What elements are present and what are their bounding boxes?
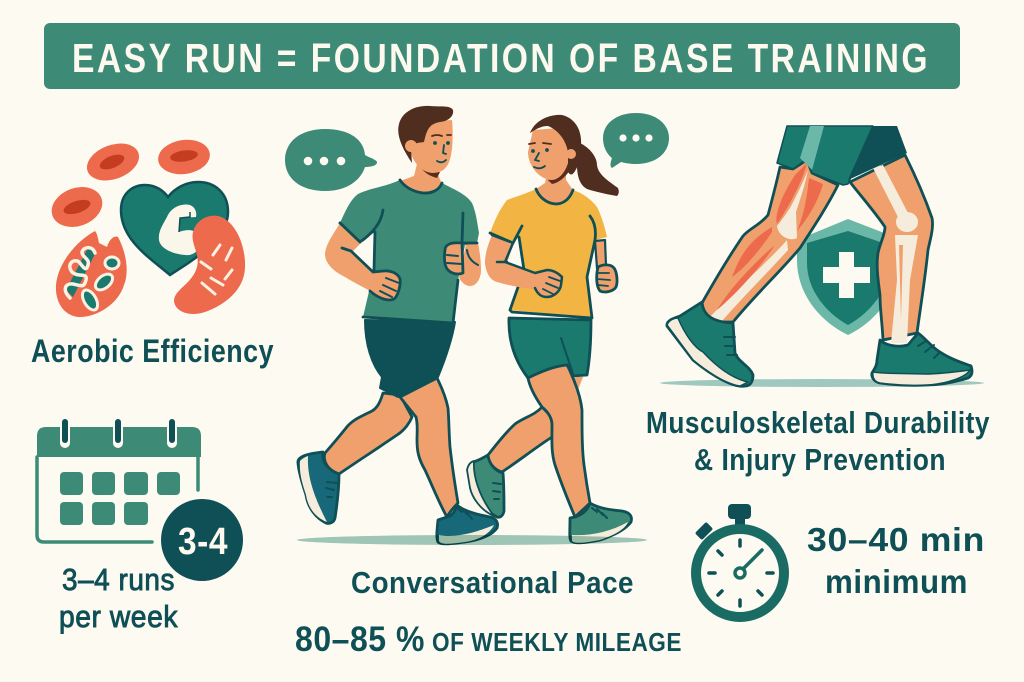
text: durability: & Injury Prevention [694, 442, 946, 477]
back shoe [298, 452, 339, 523]
ground shadow under legs [660, 379, 984, 387]
shorts back [848, 126, 907, 180]
icon: heart [121, 182, 228, 275]
text: conversational pace: Conversational Pace [351, 565, 634, 600]
ear [566, 149, 576, 159]
shorts [509, 318, 591, 378]
calf muscle [732, 227, 772, 277]
icon: stopwatch [695, 504, 784, 617]
arm right [595, 240, 606, 268]
text: runs per week: 3–4 runs [62, 562, 175, 597]
ponytail [577, 143, 619, 196]
ear [405, 140, 417, 152]
text: durability [646, 405, 990, 477]
arm right [459, 243, 481, 286]
shirt [340, 180, 479, 323]
text: duration: minimum [825, 563, 968, 600]
back shoe [473, 455, 504, 517]
text: weekly mileage: OF WEEKLY MILEAGE [432, 627, 682, 657]
icon: mitochondrion [56, 231, 127, 317]
icon: muscle [174, 216, 245, 314]
title [44, 23, 960, 89]
front shoe [437, 505, 498, 544]
back leg [324, 393, 412, 474]
face [529, 143, 551, 168]
neck and head [400, 160, 442, 193]
right leg bones [873, 165, 908, 217]
text: weekly mileage: 80–85 % [295, 620, 425, 659]
front leg [400, 378, 458, 517]
text: runs per week: per week [59, 599, 178, 634]
icon: red blood cells [46, 137, 212, 234]
icon: calendar [37, 419, 243, 581]
hair [398, 106, 453, 163]
shin bone and muscle [707, 240, 788, 321]
panel: aerobic efficiency icons [46, 137, 245, 317]
neck and head [536, 165, 573, 203]
illustration: female runner [467, 115, 631, 543]
knee bone [777, 170, 808, 239]
heading: aerobic efficiency: Aerobic Efficiency [31, 333, 274, 369]
ground shadow under runners [297, 535, 647, 545]
front leg [528, 365, 590, 517]
text: weekly mileage [295, 620, 682, 659]
icon: shield [797, 219, 897, 335]
quad muscles [776, 163, 807, 224]
back leg [488, 407, 555, 472]
arm left [325, 223, 400, 300]
right hand [444, 243, 463, 274]
shirt [490, 189, 607, 318]
illustration: male runner [298, 106, 498, 544]
text: runs per week [59, 562, 178, 634]
left leg [702, 160, 838, 322]
text: duration: 30–40 min [807, 521, 985, 558]
right shoe [872, 333, 972, 385]
icon: speech bubble right [603, 113, 669, 168]
shorts front [777, 126, 873, 185]
hair [530, 115, 581, 174]
right leg [850, 155, 933, 340]
face [432, 135, 451, 162]
left shoe [667, 302, 753, 386]
illustration: legs with anatomy [667, 126, 972, 386]
hand right [597, 265, 617, 292]
arm left [485, 235, 562, 297]
icon: calendar: 3-4 [178, 521, 228, 563]
icon: speech bubble left [285, 129, 377, 191]
shorts [365, 320, 455, 397]
text: duration [807, 521, 985, 600]
front shoe [570, 503, 631, 543]
